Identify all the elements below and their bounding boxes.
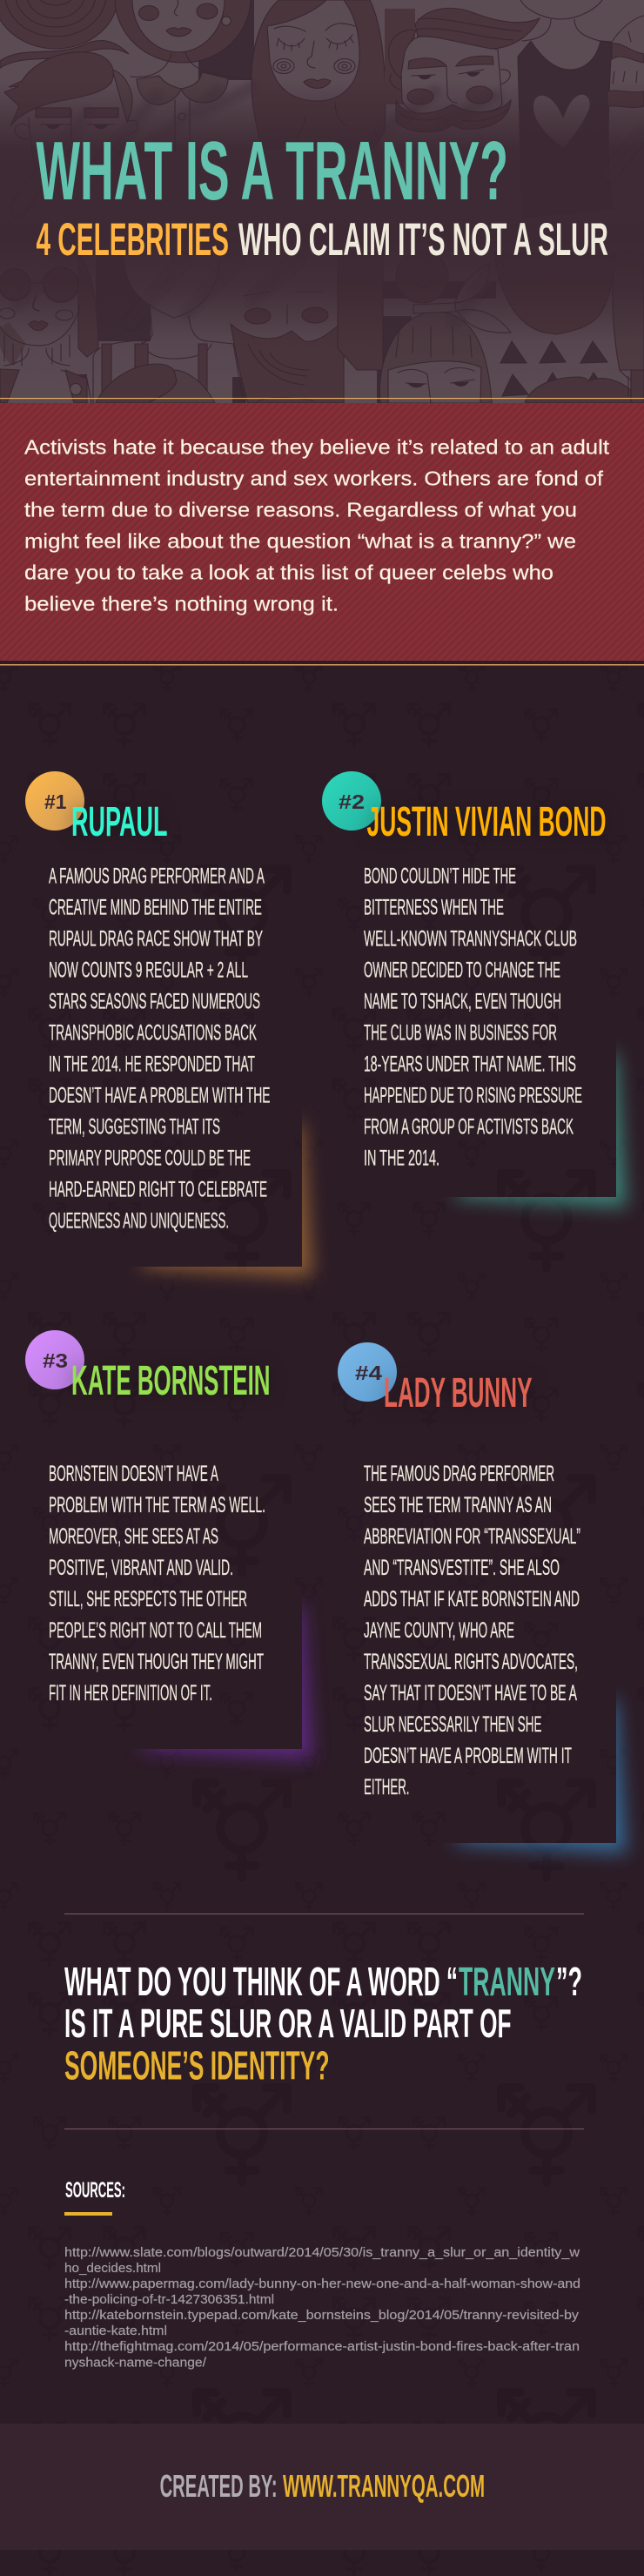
description: STARS SEASONS FACED NUMEROUS: [49, 990, 260, 1013]
description: IN THE 2014. HE RESPONDED THAT: [49, 1053, 255, 1076]
header illustration: crowd of faces: [0, 0, 644, 403]
closing question: ”?: [556, 1959, 582, 2004]
name: KATE BORNSTEIN: [71, 1357, 270, 1404]
description: FIT IN HER DEFINITION OF IT.: [49, 1682, 212, 1705]
sources list: http://katebornstein.typepad.com/kate_bornsteins_blog/2014/05/tranny-revisited-by: [64, 2308, 580, 2323]
description: PRIMARY PURPOSE COULD BE THE: [49, 1147, 251, 1170]
description: JAYNE COUNTY, WHO ARE: [364, 1619, 514, 1643]
description: BORNSTEIN DOESN’T HAVE A: [49, 1463, 218, 1486]
intro text: entertainment industry and sex workers. Others are fond of: [24, 467, 604, 490]
hair band: [0, 41, 129, 68]
girl with bun: [338, 252, 383, 370]
description: RUPAUL DRAG RACE SHOW THAT BY: [49, 927, 263, 951]
subtitle: [37, 214, 608, 266]
description: [49, 864, 270, 1233]
description: TRANNY, EVEN THOUGH THEY MIGHT: [49, 1651, 264, 1674]
dark overlay: [0, 0, 644, 403]
description: BITTERNESS WHEN THE: [364, 896, 504, 919]
description: STILL, SHE RESPECTS THE OTHER: [49, 1588, 247, 1611]
upside-down bearded man: [494, 252, 614, 334]
closing question: TRANNY: [459, 1959, 555, 2004]
description: TRANSPHOBIC ACCUSATIONS BACK: [49, 1021, 257, 1045]
closing question: SOMEONE’S IDENTITY?: [64, 2043, 329, 2088]
sources heading: SOURCES:: [65, 2178, 125, 2203]
footer label: CREATED BY:: [160, 2468, 278, 2504]
panel: intro: [0, 403, 644, 661]
badge #2: #2: [339, 790, 365, 813]
intro text: the term due to diverse reasons. Regardless of what you: [24, 499, 577, 521]
badge #1: [25, 771, 84, 831]
panel: card 3 Kate Bornstein: [25, 1330, 270, 1705]
description: A FAMOUS DRAG PERFORMER AND A: [49, 864, 265, 888]
glasses woman: [78, 252, 98, 357]
description: TERM, SUGGESTING THAT ITS: [49, 1115, 220, 1139]
intro text: might feel like about the question “what is a tranny?” we: [24, 530, 576, 553]
description: BOND COULDN’T HIDE THE: [364, 864, 516, 888]
badge #1: #1: [44, 790, 67, 813]
card glows: [137, 1049, 627, 1853]
closing question: [64, 1959, 582, 2088]
description: EITHER.: [364, 1776, 409, 1799]
man two: [385, 9, 415, 104]
sources list: http://www.papermag.com/lady-bunny-on-her-new-one-and-a-half-woman-show-and: [64, 2277, 580, 2291]
description: QUEERNESS AND UNIQUENESS.: [49, 1209, 229, 1233]
footer url: WWW.TRANNYQA.COM: [283, 2468, 485, 2504]
sources list: ho_decides.html: [64, 2261, 161, 2276]
description: IN THE 2014.: [364, 1147, 439, 1170]
description: [49, 1463, 265, 1705]
description: [364, 1463, 580, 1799]
name: RUPAUL: [71, 798, 167, 845]
triangles: [500, 341, 607, 396]
sources list: nyshack-name-change/: [64, 2356, 207, 2370]
description: PROBLEM WITH THE TERM AS WELL.: [49, 1494, 265, 1517]
description: POSITIVE, VIBRANT AND VALID.: [49, 1557, 233, 1580]
sources underline: [64, 2212, 112, 2216]
man one: [112, 70, 132, 122]
intro text: [24, 436, 610, 615]
footer: [0, 2424, 644, 2550]
description: HARD-EARNED RIGHT TO CELEBRATE: [49, 1178, 267, 1201]
woman three with heart shirt: [520, 0, 644, 44]
shoulders and collar: [131, 52, 254, 80]
card backgrounds: [17, 849, 616, 1843]
dark gaps between figures: [0, 0, 496, 403]
panel: card 4 Lady Bunny: [338, 1342, 580, 1799]
centre face and striped shirt: [124, 252, 220, 318]
gold rule above intro: [0, 398, 644, 399]
badge #4: [338, 1342, 397, 1402]
badge #2: [322, 771, 381, 831]
description: DOESN’T HAVE A PROBLEM WITH THE: [49, 1084, 270, 1107]
intro text: believe there’s nothing wrong it.: [24, 593, 339, 615]
description: PEOPLE’S RIGHT NOT TO CALL THEM: [49, 1619, 262, 1643]
intro text: dare you to take a look at this list of queer celebs who: [24, 562, 553, 584]
description: NOW COUNTS 9 REGULAR + 2 ALL: [49, 958, 248, 982]
background pattern: transgender symbols: [0, 666, 644, 2576]
description: [364, 864, 582, 1170]
sources list: [64, 2245, 580, 2370]
description: MOREOVER, SHE SEES AT AS: [49, 1525, 218, 1549]
badge #3: [25, 1330, 84, 1389]
sources list: -auntie-kate.html: [64, 2324, 167, 2338]
intro text: Activists hate it because they believe it’s related to an adult: [24, 436, 610, 459]
beard man: [231, 322, 344, 403]
woman one hair and face: [115, 0, 251, 63]
sources list: http://thefightmag.com/2014/05/performance-artist-justin-bond-fires-back-after-tran: [64, 2339, 580, 2354]
badge #4: #4: [355, 1362, 382, 1384]
gold rule below intro: [0, 664, 644, 665]
hat swirl top left: [0, 0, 118, 49]
sources list: -the-policing-of-tr-1427306351.html: [64, 2292, 274, 2307]
sources list: http://www.slate.com/blogs/outward/2014/05/30/is_tranny_a_slur_or_an_identity_w: [64, 2245, 580, 2260]
badge #3: #3: [43, 1349, 68, 1372]
subtitle highlight: 4 CELEBRITIES: [37, 214, 229, 266]
description: CREATIVE MIND BEHIND THE ENTIRE: [49, 896, 262, 919]
panel: card 1 RuPaul: [25, 771, 270, 1233]
hair bottom right and right woman: [525, 377, 641, 403]
panel: card 2 Justin Vivian Bond: [322, 771, 606, 1170]
woman two: [252, 0, 386, 148]
